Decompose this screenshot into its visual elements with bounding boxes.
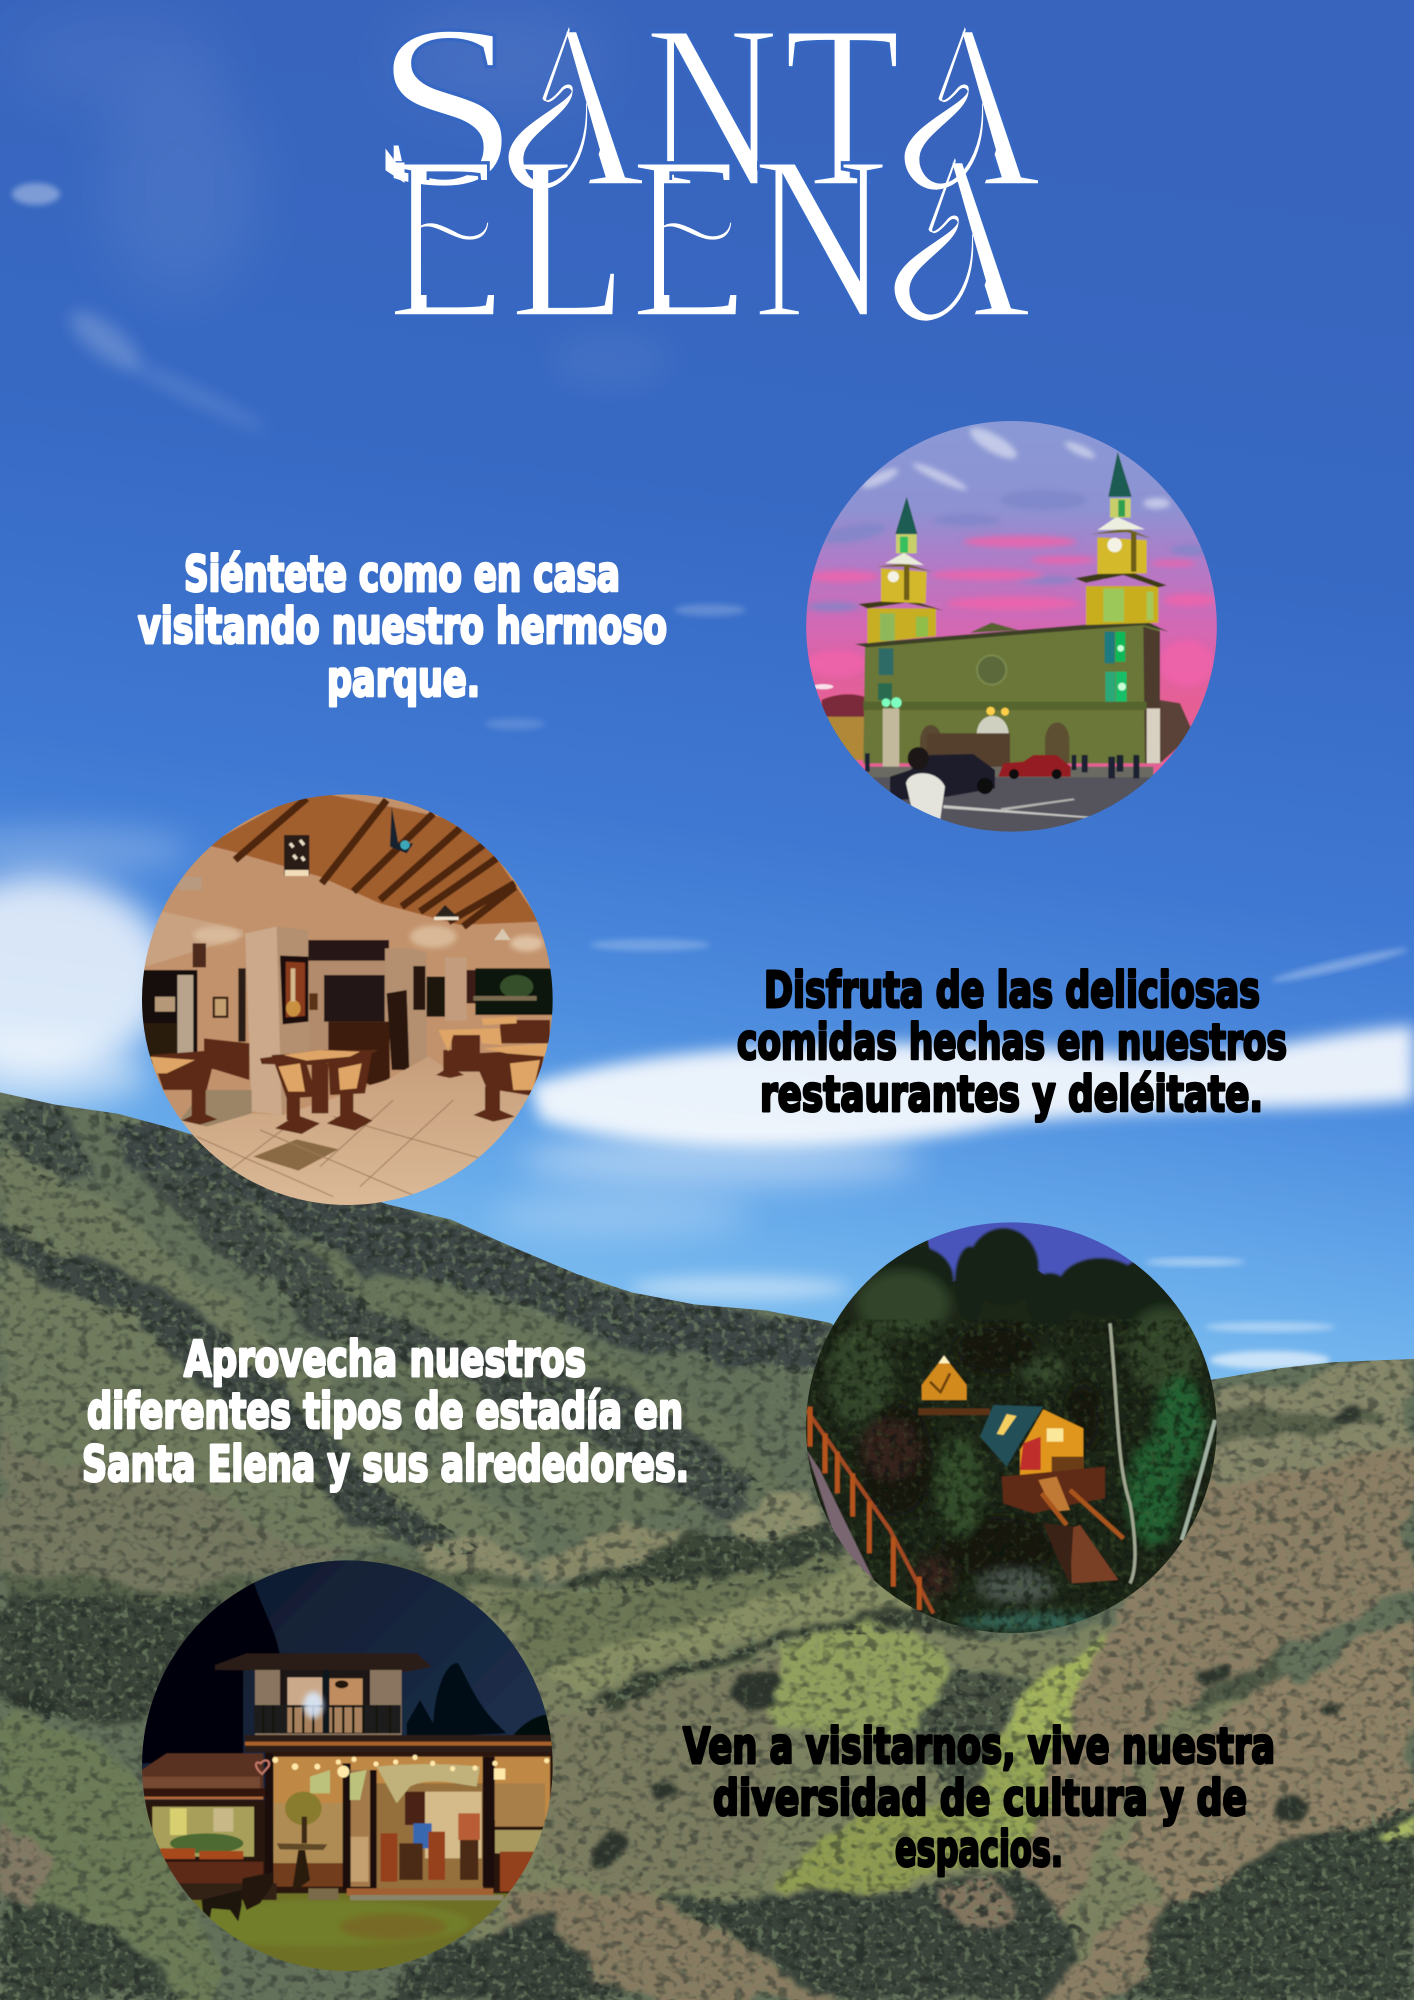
tree canopy (827, 1270, 1205, 1630)
interior seen through door (373, 1783, 483, 1890)
left walkway and railing (807, 1450, 877, 1587)
lower-left hills (3, 1555, 533, 1604)
guitar frame (280, 956, 308, 1024)
main cabin (980, 1405, 1043, 1467)
string lights (272, 1755, 549, 1780)
line 2: ELENA: N (753, 107, 888, 367)
title swash ornaments (386, 28, 983, 320)
bonsai table (285, 1792, 322, 1825)
black car (890, 754, 995, 800)
green stained windows (1105, 632, 1115, 663)
decks and stairs (1052, 1457, 1083, 1473)
posts (265, 1753, 495, 1890)
pillar (245, 927, 310, 1115)
road (800, 777, 1233, 843)
truck (927, 733, 1010, 767)
line 2: ELENA: E (388, 109, 506, 367)
left mountain lighter bands (0, 1141, 541, 1547)
photo: treehouse in the forest (800, 1217, 1223, 1640)
arch left (821, 694, 865, 718)
left window (145, 1800, 265, 1887)
text block: Aprovecha nuestros (82, 1331, 689, 1493)
line 2: ELENA: A (879, 109, 1031, 368)
street lights (986, 706, 1010, 716)
photo: church at sunset (800, 417, 1233, 843)
man (906, 773, 945, 821)
curtains (377, 1764, 480, 1803)
people (865, 753, 1139, 778)
line 2: ELENA: L (510, 109, 627, 367)
bright patches (776, 1626, 965, 1735)
lawn (137, 1893, 560, 1980)
left door (137, 970, 197, 1063)
text block: Siéntete como en casa (138, 546, 667, 708)
back wall and bar (308, 960, 388, 1060)
small cabin (922, 1356, 967, 1400)
dark tree mass (137, 1555, 280, 1763)
tables and chairs (152, 1020, 550, 1134)
line 2: ELENA (394, 161, 1028, 316)
round bushes (10, 1403, 1369, 1857)
right windows (427, 977, 445, 1017)
bench (202, 1890, 242, 1922)
text block: Siéntete como en casa: parque. (327, 651, 480, 708)
main lit front (265, 1752, 555, 1893)
text block: Disfruta de las deliciosas (737, 962, 1287, 1123)
line 2: ELENA: E (631, 108, 748, 367)
right brown slopes (1020, 1445, 1414, 2000)
photo: restaurant interior (137, 790, 560, 1213)
title: SANTA ELENA (386, 27, 1038, 321)
ventilated band (308, 940, 389, 961)
text block: Aprovecha nuestros: Santa Elena y sus alrededores. (82, 1436, 689, 1493)
text block: Aprovecha nuestros: diferentes tipos de estadía en (87, 1383, 683, 1440)
forest bands (99, 1111, 830, 1377)
red car (998, 755, 1071, 777)
background: green mountains and valley (0, 1080, 1414, 2000)
text block: Aprovecha nuestros: Aprovecha nuestros (184, 1331, 586, 1388)
lanterns (284, 835, 309, 876)
floor (140, 1033, 553, 1213)
bottom forest and brown field (506, 1890, 828, 2000)
floor beam (245, 1735, 555, 1752)
valley tan hills (415, 1529, 541, 1574)
text block: Siéntete como en casa: Siéntete como en casa (184, 546, 620, 603)
middle olive slopes (469, 1553, 1414, 2000)
soffit and lights (145, 912, 243, 967)
photo: country house at night (137, 1555, 560, 1980)
text block: Ven a visitarnos: espacios. (895, 1821, 1063, 1878)
balcony rail (254, 1705, 401, 1733)
heart (256, 1760, 269, 1774)
right tower (1086, 586, 1158, 625)
tree silhouettes against the sky (880, 1228, 1173, 1333)
tile roof (142, 1753, 263, 1788)
line 1: SANTA (393, 28, 1038, 186)
upper storey (215, 1653, 432, 1672)
ceiling (207, 790, 540, 925)
church body (863, 622, 1160, 763)
text block: Siéntete como en casa: visitando nuestro hermoso (138, 598, 667, 655)
doors (920, 724, 940, 752)
text block: Ven a visitarnos (683, 1718, 1275, 1878)
left tower (867, 608, 936, 643)
